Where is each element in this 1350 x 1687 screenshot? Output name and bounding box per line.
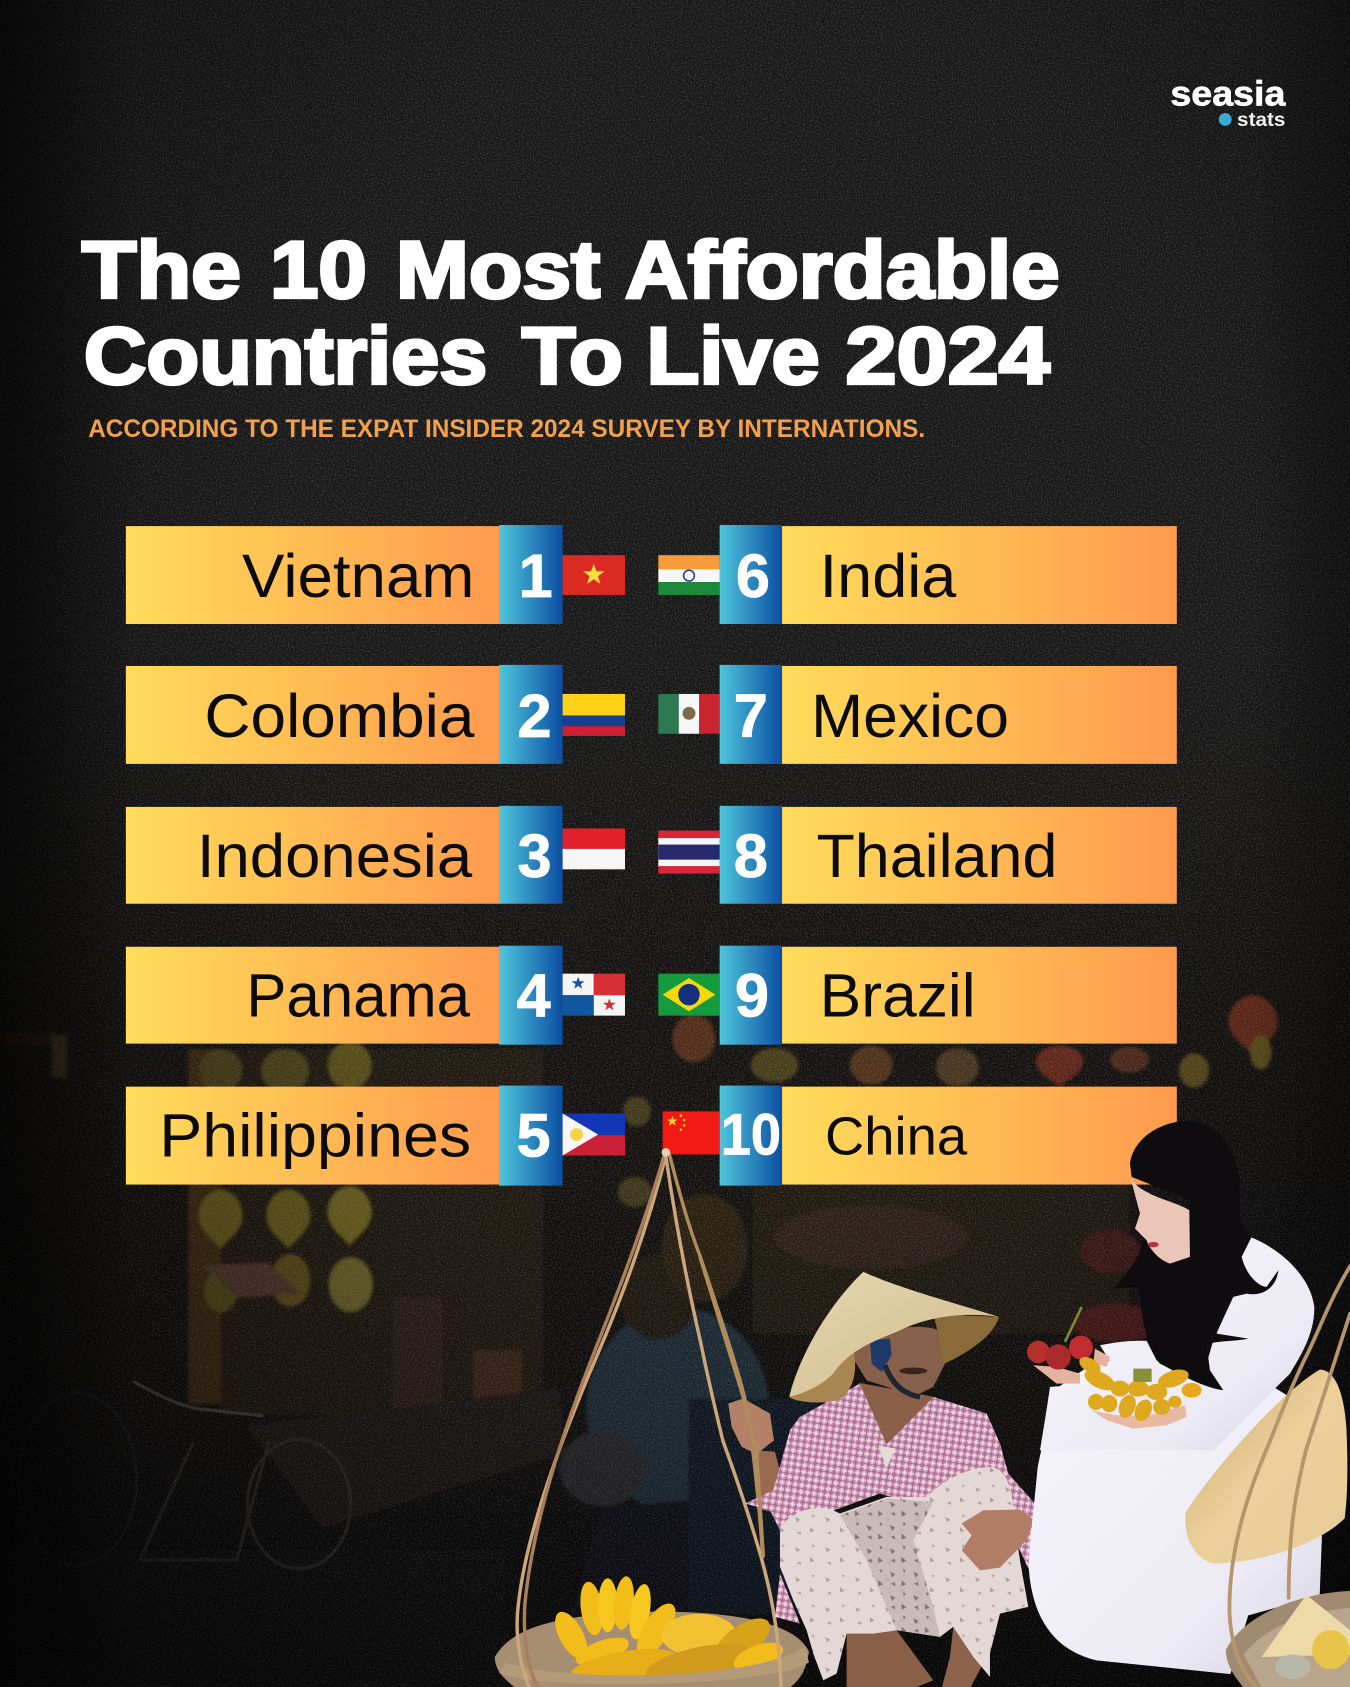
photo: woman in white ao dai holding fruit [1027, 1121, 1350, 1687]
ranking: China: 10 [721, 1102, 781, 1167]
title: Most [396, 225, 600, 315]
ranking: Colombia: Colombia [204, 681, 475, 750]
shaded fold of pants [840, 1499, 940, 1637]
upper body [1027, 1121, 1314, 1450]
feet and shins [847, 1630, 933, 1687]
ranking: Colombia: 2 [518, 681, 552, 750]
face [1131, 1179, 1190, 1264]
ranking: Vietnam: 1 [519, 541, 553, 610]
grip pole [700, 1257, 763, 1557]
rambutan [1027, 1336, 1093, 1370]
hat [789, 1272, 999, 1397]
shirt [745, 1384, 1047, 1569]
bananas [549, 1575, 787, 1687]
poles [517, 1151, 781, 1687]
photo: elderly vendor in conical hat [700, 1257, 1047, 1687]
ranking: Mexico: 7 [734, 681, 768, 750]
ranking: Philippines [126, 1086, 625, 1186]
title: 10 [270, 225, 367, 315]
ranking: Panama: 4 [516, 961, 551, 1030]
subtitle: ACCORDING TO THE EXPAT INSIDER 2024 SURVEY BY INTERNATIONS. [88, 416, 925, 443]
skirt [1029, 1361, 1322, 1674]
ranking: Thailand: Thailand [816, 821, 1057, 890]
ranking: Indonesia: Indonesia [197, 821, 473, 890]
blue strap [870, 1339, 892, 1372]
ranking: Panama [126, 946, 625, 1045]
ranking: Philippines: Philippines [159, 1101, 471, 1170]
ranking: Brazil: Brazil [820, 961, 976, 1030]
ranking: Brazil [658, 946, 1177, 1045]
ranking: Mexico: Mexico [811, 681, 1009, 750]
photo: carrying poles with bananas basket [495, 1148, 809, 1687]
ranking: Philippines: 5 [516, 1101, 551, 1170]
title: Live [646, 312, 820, 402]
pants [780, 1467, 1028, 1680]
title: To [522, 312, 623, 402]
ranking: India: 6 [736, 541, 770, 610]
title: 2024 [845, 312, 1050, 402]
ranking: Panama: Panama [246, 961, 471, 1030]
ranking: Indonesia [126, 806, 625, 904]
lower hand [1092, 1405, 1187, 1429]
logo: seasia stats: seasia [1170, 73, 1286, 113]
hair [1113, 1121, 1278, 1390]
title [82, 225, 1060, 402]
resting hand [962, 1510, 1034, 1570]
background photo: dim street with lanterns [0, 995, 1350, 1687]
raised hand [728, 1399, 774, 1454]
basket rim [499, 1646, 809, 1684]
logo: seasia stats: stats [1237, 109, 1285, 131]
arm [755, 1450, 782, 1512]
ranking: Mexico [658, 665, 1177, 764]
bananas in hands [1077, 1354, 1202, 1424]
face [850, 1327, 945, 1397]
ranking: Thailand: 8 [734, 821, 768, 890]
title: Countries [84, 312, 487, 402]
title: The [82, 225, 241, 315]
title: Affordable [625, 225, 1060, 315]
woven basket [495, 1612, 809, 1687]
neck [859, 1383, 934, 1444]
conical hat and basket at right [1185, 1370, 1350, 1687]
ranking: China [663, 1086, 1177, 1186]
shirt lower tail [775, 1574, 800, 1624]
hat underside right [933, 1314, 999, 1364]
ranking: Brazil: 9 [735, 961, 769, 1030]
upper hand [1033, 1349, 1110, 1384]
ranking: India [658, 525, 1177, 624]
undershirt [878, 1445, 895, 1469]
hat underside left [789, 1350, 855, 1403]
ranking: Vietnam [126, 525, 625, 624]
bicycle in background [18, 1381, 351, 1569]
ranking: Colombia [126, 665, 625, 764]
ranking: India: India [820, 541, 957, 610]
ranking: China: China [825, 1106, 967, 1166]
ranking: Thailand [658, 806, 1177, 904]
chin strap [885, 1365, 920, 1397]
ranking: Indonesia: 3 [518, 821, 552, 890]
ranking: Vietnam: Vietnam [242, 541, 474, 610]
logo: seasia stats [1170, 73, 1286, 131]
right poles [1229, 1266, 1350, 1687]
